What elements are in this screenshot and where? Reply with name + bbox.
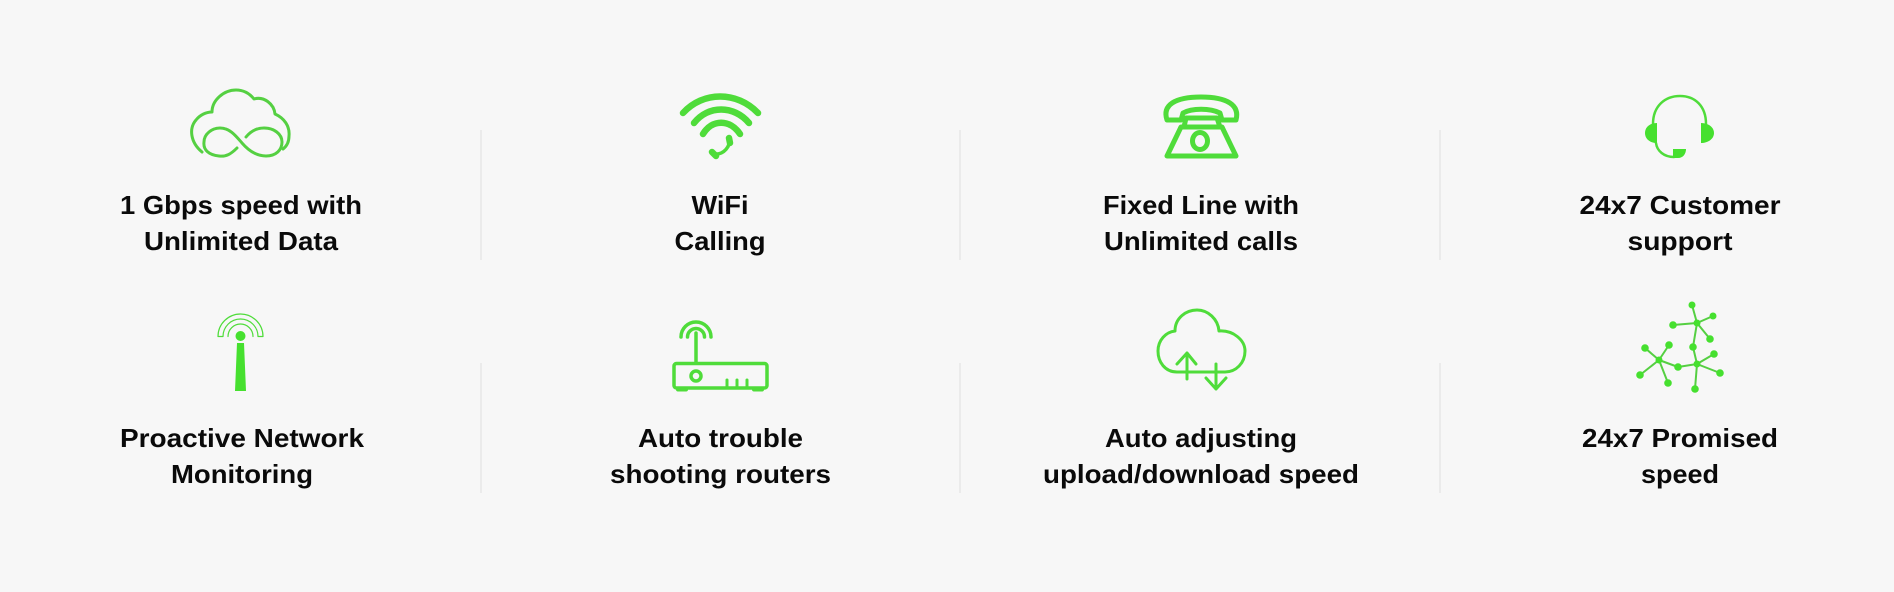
label text — [120, 423, 365, 489]
icon: cloud with infinity — [192, 90, 289, 156]
icon: wifi with handset — [683, 96, 758, 156]
label text: Auto trouble — [638, 423, 803, 453]
label text — [610, 423, 831, 489]
label text: Fixed Line with — [1103, 190, 1299, 220]
panel: fixed line with unlimited calls — [1103, 97, 1299, 256]
label text — [674, 190, 766, 256]
panel: 24x7 promised speed — [1582, 302, 1778, 489]
icon: cloud with up and down arrows — [1158, 310, 1245, 389]
label text — [1103, 190, 1299, 256]
icon: router — [674, 322, 767, 390]
panel: WiFi calling — [674, 96, 766, 256]
label text: Calling — [674, 226, 766, 256]
panel: auto adjusting upload/download speed — [1043, 310, 1359, 489]
label text: Proactive Network — [120, 423, 365, 453]
label text: support — [1628, 226, 1733, 256]
icon: telephone — [1166, 97, 1237, 156]
panel: 24x7 customer support — [1580, 96, 1780, 256]
icon: headset — [1645, 96, 1714, 158]
panel: proactive network monitoring — [120, 314, 365, 489]
label text: 24x7 Customer — [1580, 190, 1780, 220]
label text: Unlimited calls — [1104, 226, 1298, 256]
label text: upload/download speed — [1043, 459, 1359, 489]
label text: WiFi — [692, 190, 748, 220]
label text: 24x7 Promised — [1582, 423, 1778, 453]
label text: Auto adjusting — [1105, 423, 1297, 453]
label text: speed — [1641, 459, 1719, 489]
icon: signal tower — [218, 314, 263, 391]
label text — [120, 190, 362, 256]
label text — [1580, 190, 1780, 256]
label text — [1043, 423, 1359, 489]
label text: shooting routers — [610, 459, 831, 489]
label text: 1 Gbps speed with — [120, 190, 362, 220]
icon: network nodes — [1636, 302, 1724, 393]
label text — [1582, 423, 1778, 489]
panel: auto trouble shooting routers — [610, 322, 831, 489]
panel: 1 Gbps speed with unlimited data — [120, 90, 362, 256]
label text: Monitoring — [171, 459, 313, 489]
label text: Unlimited Data — [144, 226, 339, 256]
